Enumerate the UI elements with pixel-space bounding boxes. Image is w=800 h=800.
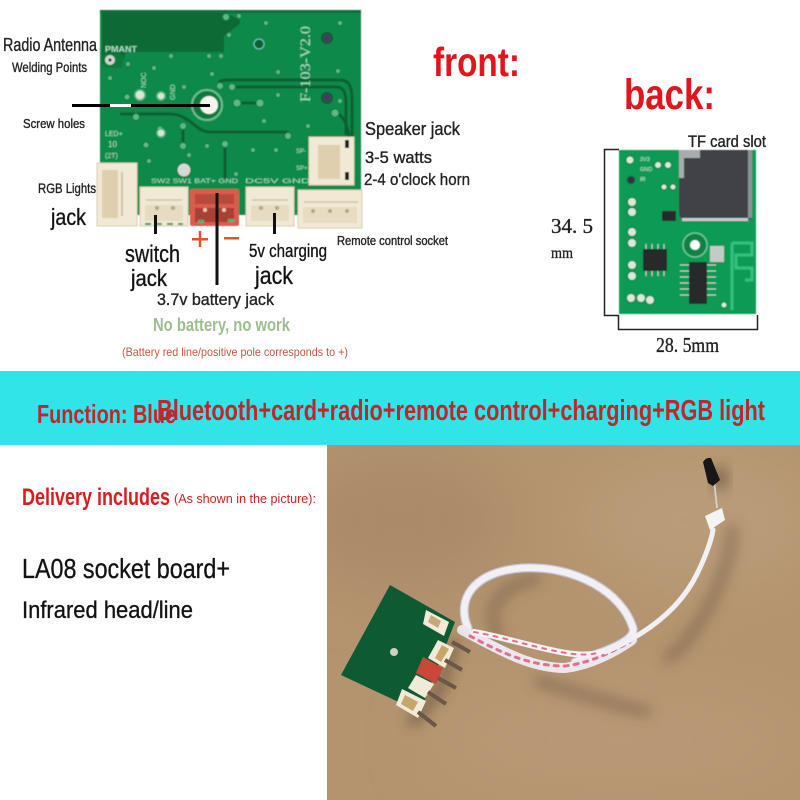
mounting hole bbox=[683, 233, 707, 257]
heading: delivery includes: Delivery includes bbox=[22, 484, 170, 511]
silkscreen labels: DC5V GND bbox=[245, 178, 311, 185]
function label: Function: Blue bbox=[37, 399, 176, 429]
silkscreen labels: F-103-V2.0 bbox=[298, 26, 314, 102]
label: charging jack: jack bbox=[254, 262, 293, 290]
silkscreen labels: GND bbox=[170, 84, 177, 100]
wifi antenna bbox=[732, 243, 752, 310]
panel: front of circuit board bbox=[97, 10, 362, 228]
speaker connector bbox=[309, 137, 354, 185]
label: battery jack: 3.7v battery jack bbox=[157, 290, 274, 309]
label: radio antenna: Radio Antenna bbox=[3, 35, 98, 55]
switch connector bbox=[140, 187, 188, 226]
chip pins bbox=[646, 244, 716, 295]
board shadow bbox=[410, 640, 455, 725]
plus and minus marks bbox=[192, 231, 239, 247]
silkscreen text: 3V3 bbox=[640, 157, 650, 163]
silkscreen labels: SW2 SW1 BAT+ GND bbox=[151, 178, 238, 185]
silkscreen labels: (2T) bbox=[105, 153, 118, 160]
board vias bbox=[108, 14, 342, 177]
crystal component bbox=[710, 246, 724, 262]
note: polarity: (Battery red line/positive pole corresponds to +) bbox=[122, 345, 348, 359]
solder pads bbox=[626, 156, 727, 308]
width dimension bracket bbox=[618, 315, 758, 330]
green board bbox=[341, 585, 455, 712]
silkscreen labels: PMANT bbox=[105, 45, 137, 54]
remote connector bbox=[298, 190, 362, 228]
label: charging: 5v charging bbox=[249, 241, 327, 261]
dimension: height value: 34. 5 bbox=[551, 214, 593, 238]
silkscreen text: IR bbox=[640, 177, 646, 183]
RGB connector bbox=[97, 163, 137, 226]
dimension: width value: 28. 5mm bbox=[656, 333, 719, 357]
silkscreen labels: LED+ bbox=[105, 131, 123, 138]
ribbon cable loop bbox=[462, 530, 713, 668]
label: RGB jack: jack bbox=[50, 204, 86, 230]
label: speaker horn: 2-4 o'clock horn bbox=[364, 170, 470, 189]
note: as shown: (As shown in the picture): bbox=[174, 491, 316, 506]
screw hole bbox=[192, 90, 222, 120]
switch pointer bbox=[154, 215, 157, 234]
IR head shadow bbox=[713, 466, 727, 490]
label: speaker watts: 3-5 watts bbox=[365, 148, 432, 167]
connectors on board edge bbox=[396, 610, 454, 718]
antenna welding point bbox=[103, 54, 123, 68]
heading: back: back: bbox=[624, 71, 715, 119]
screw hole pointer bbox=[72, 104, 210, 107]
label: RGB lights: RGB Lights bbox=[38, 180, 96, 196]
label: screw holes: Screw holes bbox=[23, 116, 85, 131]
text: infrared head: Infrared head/line bbox=[22, 597, 193, 624]
silkscreen labels: SP- bbox=[296, 149, 306, 155]
cable shadow bbox=[493, 525, 732, 712]
connector pins bbox=[418, 642, 470, 726]
photo: delivered board and infrared cable bbox=[327, 445, 800, 800]
silkscreen text bbox=[640, 157, 652, 183]
charging connector bbox=[246, 187, 294, 226]
label: TF card slot: TF card slot bbox=[688, 132, 766, 151]
cardboard tones bbox=[290, 450, 800, 800]
label: speaker jack: Speaker jack bbox=[365, 119, 461, 139]
battery connector bbox=[190, 189, 239, 226]
white connector bbox=[705, 508, 725, 530]
silkscreen text: GND bbox=[640, 167, 652, 173]
function band bbox=[0, 371, 800, 445]
height dimension bracket bbox=[604, 150, 619, 316]
battery pointer bbox=[216, 193, 218, 285]
IR wire and head bbox=[703, 458, 725, 530]
note: no battery: No battery, no work bbox=[153, 315, 291, 335]
silkscreen labels: 10 bbox=[108, 140, 117, 149]
silkscreen labels: NOC bbox=[141, 72, 148, 88]
chips bbox=[643, 211, 707, 304]
label: remote control socket: Remote control socket bbox=[337, 234, 448, 248]
silkscreen labels bbox=[105, 26, 314, 185]
label: switch: switch bbox=[125, 241, 180, 268]
text: socket board: LA08 socket board+ bbox=[22, 553, 230, 584]
antenna ground area bbox=[102, 13, 240, 64]
dimension: height unit: mm bbox=[551, 245, 573, 262]
label: switch jack: jack bbox=[130, 265, 167, 291]
label: welding points: Welding Points bbox=[12, 59, 87, 75]
board traces bbox=[120, 80, 352, 180]
panel: back of circuit board bbox=[619, 150, 756, 314]
charging pointer bbox=[273, 213, 276, 234]
silkscreen labels: SP+ bbox=[296, 166, 308, 172]
heading: front: front: bbox=[433, 39, 520, 85]
TF card slot bbox=[679, 150, 752, 221]
